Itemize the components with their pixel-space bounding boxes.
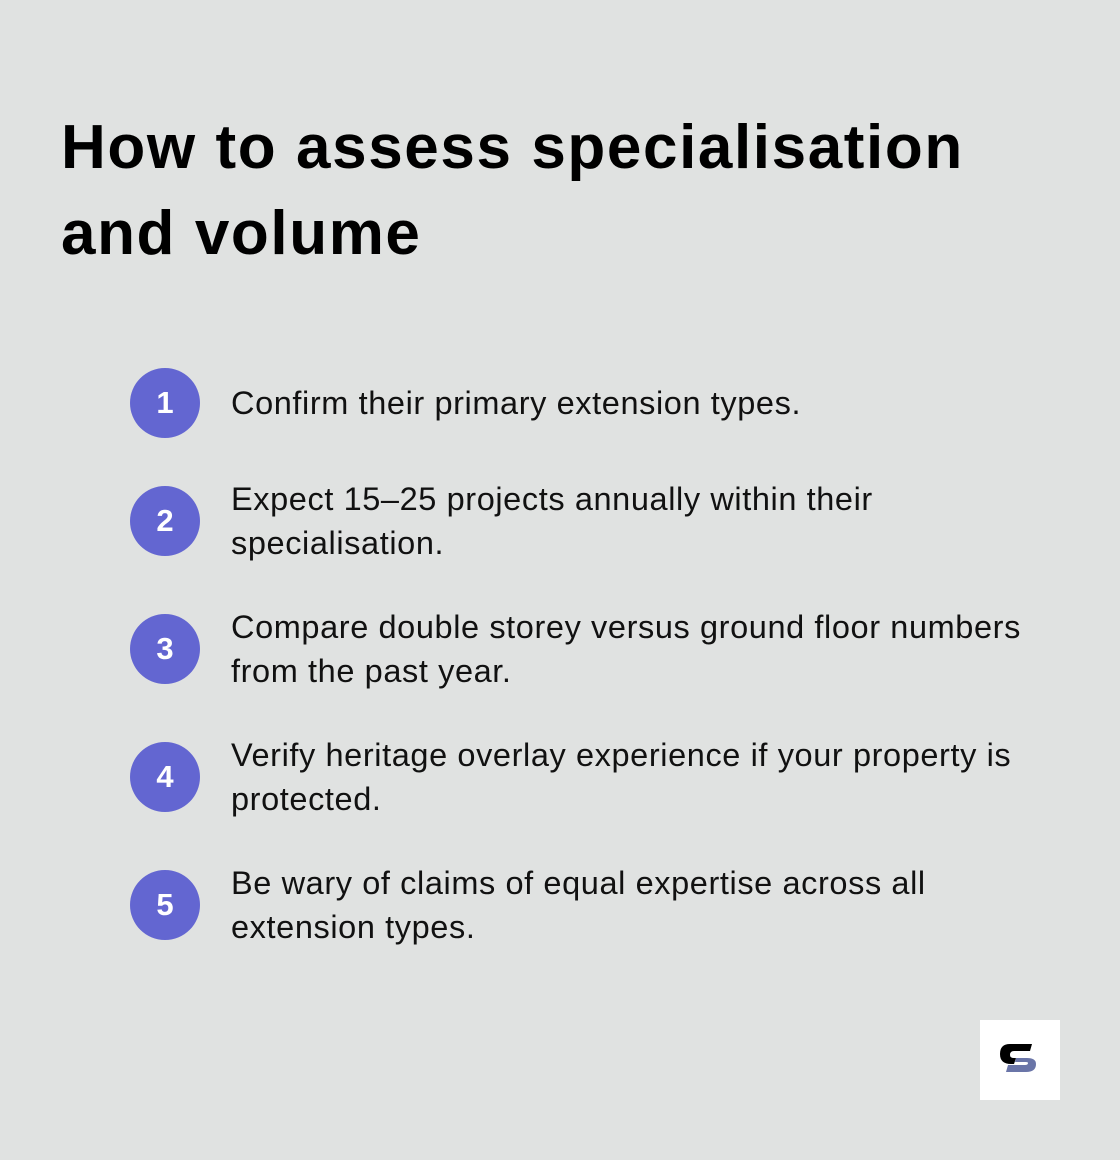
item 1: 1 xyxy=(156,385,174,420)
item 2 xyxy=(130,481,873,561)
item 3: from the past year. xyxy=(231,653,512,689)
logo xyxy=(980,1020,1060,1100)
item 2: 2 xyxy=(156,503,174,538)
item 5: extension types. xyxy=(231,909,475,945)
item 3: Compare double storey versus ground floor numbers xyxy=(231,609,1021,645)
item 5: Be wary of claims of equal expertise across all xyxy=(231,865,926,901)
item 4 xyxy=(130,737,1011,817)
item 4: protected. xyxy=(231,781,382,817)
item 2: specialisation. xyxy=(231,525,444,561)
item 5: 5 xyxy=(156,887,174,922)
item 1 xyxy=(130,368,801,438)
item 1: Confirm their primary extension types. xyxy=(231,385,801,421)
title xyxy=(61,113,964,268)
item 2: Expect 15–25 projects annually within their xyxy=(231,481,873,517)
title: and volume xyxy=(61,199,422,268)
item 3 xyxy=(130,609,1021,689)
item 4: 4 xyxy=(156,759,174,794)
title: How to assess specialisation xyxy=(61,113,964,182)
item 4: Verify heritage overlay experience if your property is xyxy=(231,737,1011,773)
item 3: 3 xyxy=(156,631,174,666)
item 5 xyxy=(130,865,926,945)
